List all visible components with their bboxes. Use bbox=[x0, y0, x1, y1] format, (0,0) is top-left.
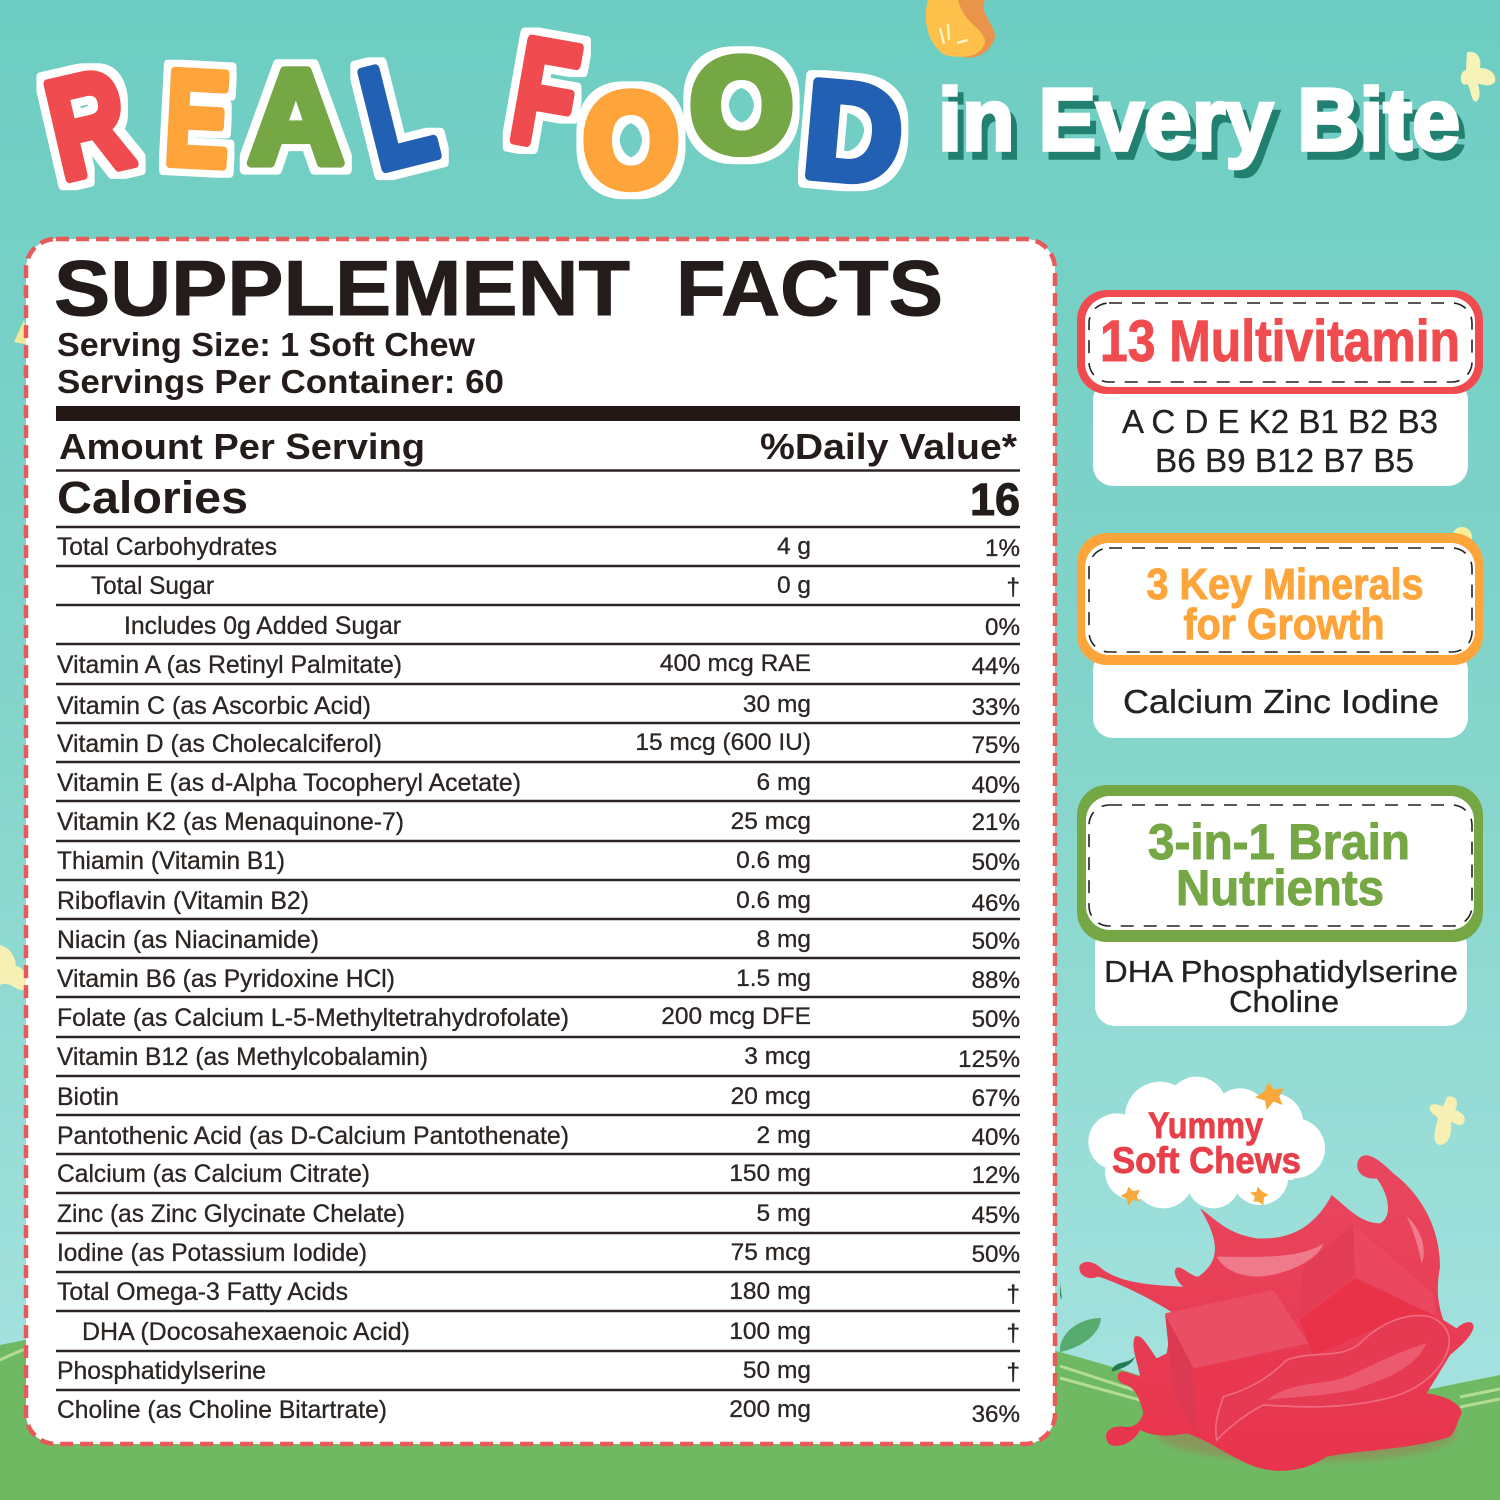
letter E: E bbox=[161, 41, 233, 195]
icon: pale shape left edge bbox=[0, 945, 27, 990]
title: REAL FOOD bbox=[34, 9, 908, 213]
nutrient rows: Niacin (as Niacinamide) bbox=[57, 926, 319, 954]
nutrient rows: Calcium (as Calcium Citrate) bbox=[57, 1160, 370, 1188]
nutrient rows: 6 mg bbox=[757, 769, 811, 796]
heading: yummy soft chews: Yummy bbox=[1148, 1105, 1263, 1146]
heading: 3 key minerals: 3 Key Minerals bbox=[1146, 560, 1424, 609]
nutrient rows: Zinc (as Zinc Glycinate Chelate) bbox=[57, 1200, 405, 1228]
nutrient rows: 75% bbox=[972, 732, 1020, 759]
nutrient rows: 4 g bbox=[777, 533, 811, 560]
heading: 3-in-1 brain nutrients: 3-in-1 Brain bbox=[1148, 814, 1410, 870]
nutrient rows: 3 mcg bbox=[744, 1043, 811, 1070]
nutrient rows: 50% bbox=[972, 928, 1020, 955]
nutrient rows: 1.5 mg bbox=[736, 965, 811, 992]
nutrient rows: Pantothenic Acid (as D-Calcium Pantothenate) bbox=[57, 1122, 569, 1150]
icon: pale shape behind panel bbox=[14, 320, 30, 345]
nutrient rows: 0% bbox=[985, 614, 1020, 641]
panel: 13 multivitamin: B6 B9 B12 B7 B5 bbox=[1155, 442, 1414, 479]
letter O orange: O bbox=[584, 67, 678, 213]
left cube bbox=[1165, 1290, 1312, 1435]
panel: 3-in-1 brain nutrients: Nutrients bbox=[1176, 860, 1384, 916]
heading: yummy soft chews: Soft Chews bbox=[1112, 1140, 1301, 1181]
serving size: Serving Size: 1 Soft Chew bbox=[57, 326, 475, 363]
star right bbox=[1250, 1187, 1268, 1205]
nutrient rows: 88% bbox=[972, 967, 1020, 994]
nutrient rows: † bbox=[1006, 574, 1020, 601]
nutrient rows: 67% bbox=[972, 1085, 1020, 1112]
nutrient rows: 50% bbox=[972, 1006, 1020, 1033]
nutrient rows: 125% bbox=[958, 1046, 1020, 1073]
nutrient rows: Total Omega-3 Fatty Acids bbox=[57, 1278, 348, 1306]
nutrient rows: 50% bbox=[972, 1241, 1020, 1268]
nutrient rows: Vitamin C (as Ascorbic Acid) bbox=[57, 692, 371, 720]
icon: pale cross lower right bbox=[1430, 1096, 1465, 1145]
nutrient rows: 200 mg bbox=[729, 1396, 811, 1423]
nutrient rows: 400 mcg RAE bbox=[660, 650, 811, 677]
nutrient rows: 40% bbox=[972, 1124, 1020, 1151]
amount per serving: Amount Per Serving bbox=[59, 426, 425, 467]
brain nutrients list: DHA Phosphatidylserine bbox=[1104, 954, 1458, 989]
letter O green: O bbox=[691, 32, 792, 178]
nutrient rows: 1% bbox=[985, 535, 1020, 562]
nutrient rows: Total Sugar bbox=[91, 572, 214, 600]
calories value: 16 bbox=[970, 474, 1020, 525]
cloud bbox=[1088, 1077, 1325, 1208]
star left bbox=[1121, 1187, 1140, 1206]
nutrient rows bbox=[57, 533, 1020, 1428]
panel: 3 key minerals: for Growth bbox=[1184, 600, 1384, 649]
nutrient rows: Riboflavin (Vitamin B2) bbox=[57, 887, 309, 915]
nutrient rows: 8 mg bbox=[757, 926, 811, 953]
icon: butterfly bbox=[926, 0, 995, 58]
nutrient rows: 50% bbox=[972, 849, 1020, 876]
illustration: red splash with soft chews bbox=[1079, 1077, 1474, 1471]
nutrient rows: 21% bbox=[972, 809, 1020, 836]
nutrient rows: † bbox=[1006, 1281, 1020, 1308]
nutrient rows: 180 mg bbox=[729, 1278, 811, 1305]
heading: supplement facts bbox=[54, 244, 943, 332]
nutrient rows: 40% bbox=[972, 772, 1020, 799]
icon: pale cross top right bbox=[1461, 52, 1495, 102]
calories label: Calories bbox=[57, 472, 248, 523]
nutrient rows: 2 mg bbox=[757, 1122, 811, 1149]
subtitle: in Every Bite: in Every Bite bbox=[938, 70, 1460, 169]
nutrient rows: 0 g bbox=[777, 572, 811, 599]
nutrient rows: 30 mg bbox=[743, 691, 811, 718]
vitamin list: A C D E K2 B1 B2 B3 bbox=[1122, 403, 1438, 440]
nutrient rows: 36% bbox=[972, 1401, 1020, 1428]
letter L: L bbox=[347, 29, 449, 200]
heading: supplement facts: SUPPLEMENT bbox=[54, 244, 630, 332]
nutrient rows: 25 mcg bbox=[731, 808, 811, 835]
nutrient rows: Vitamin E (as d-Alpha Tocopheryl Acetate) bbox=[57, 769, 521, 797]
row rules bbox=[56, 470, 1020, 1390]
panel: supplement facts bbox=[26, 239, 1055, 1444]
thick rule bbox=[56, 406, 1020, 421]
heading: supplement facts: FACTS bbox=[676, 244, 943, 332]
panel: 13 multivitamin bbox=[1077, 290, 1483, 486]
splash glow bbox=[1157, 1405, 1457, 1462]
nutrient rows: Vitamin B6 (as Pyridoxine HCl) bbox=[57, 965, 395, 993]
nutrient rows: 200 mcg DFE bbox=[661, 1003, 811, 1030]
nutrient rows: 12% bbox=[972, 1162, 1020, 1189]
nutrient rows: 33% bbox=[972, 694, 1020, 721]
nutrient rows: Vitamin K2 (as Menaquinone-7) bbox=[57, 808, 404, 836]
letter R: R bbox=[34, 40, 144, 210]
letter F: F bbox=[501, 9, 589, 180]
daily value: %Daily Value* bbox=[760, 426, 1017, 467]
splash body bbox=[1079, 1155, 1474, 1471]
nutrient rows: 46% bbox=[972, 890, 1020, 917]
nutrient rows: Vitamin A (as Retinyl Palmitate) bbox=[57, 651, 402, 679]
nutrient rows: 150 mg bbox=[729, 1160, 811, 1187]
nutrient rows: Folate (as Calcium L-5-Methyltetrahydrofolate) bbox=[57, 1004, 569, 1032]
nutrient rows: 5 mg bbox=[757, 1200, 811, 1227]
nutrient rows: Biotin bbox=[57, 1083, 119, 1111]
green hills bbox=[0, 1294, 1500, 1500]
nutrient rows: 20 mcg bbox=[731, 1083, 811, 1110]
star large bbox=[1255, 1083, 1283, 1110]
nutrient rows: Includes 0g Added Sugar bbox=[124, 612, 401, 640]
heading: yummy soft chews bbox=[1112, 1105, 1301, 1181]
nutrient rows: Vitamin B12 (as Methylcobalamin) bbox=[57, 1043, 428, 1071]
nutrient rows: DHA (Docosahexaenoic Acid) bbox=[82, 1318, 410, 1346]
nutrient rows: 44% bbox=[972, 653, 1020, 680]
nutrient rows: † bbox=[1006, 1359, 1020, 1386]
nutrient rows: 75 mcg bbox=[731, 1239, 811, 1266]
nutrient rows: Vitamin D (as Cholecalciferol) bbox=[57, 730, 382, 758]
panel: 3 key minerals bbox=[1077, 533, 1483, 738]
wave highlight bbox=[1267, 1343, 1427, 1400]
letter A: A bbox=[248, 42, 344, 192]
servings per container: Servings Per Container: 60 bbox=[57, 363, 504, 400]
panel: 3-in-1 brain nutrients: Choline bbox=[1229, 984, 1339, 1019]
nutrient rows: 15 mcg (600 IU) bbox=[635, 729, 811, 756]
front wave bbox=[1216, 1316, 1449, 1440]
nutrient rows: 0.6 mg bbox=[736, 847, 811, 874]
nutrient rows: 45% bbox=[972, 1202, 1020, 1229]
icon: pale shape behind minerals box bbox=[1452, 527, 1472, 547]
nutrient rows: Choline (as Choline Bitartrate) bbox=[57, 1396, 387, 1424]
icon: leaf bbox=[1060, 1283, 1101, 1352]
nutrient rows: 50 mg bbox=[743, 1357, 811, 1384]
nutrient rows: Phosphatidylserine bbox=[57, 1357, 266, 1385]
nutrient rows: Thiamin (Vitamin B1) bbox=[57, 847, 285, 875]
nutrient rows: Iodine (as Potassium Iodide) bbox=[57, 1239, 367, 1267]
vine bbox=[1112, 1357, 1135, 1372]
nutrient rows: † bbox=[1006, 1320, 1020, 1347]
minerals list: Calcium Zinc Iodine bbox=[1123, 683, 1439, 720]
letter D: D bbox=[798, 51, 908, 213]
nutrient rows: 0.6 mg bbox=[736, 887, 811, 914]
nutrient rows: 100 mg bbox=[729, 1318, 811, 1345]
panel: 3-in-1 brain nutrients bbox=[1077, 785, 1483, 1026]
nutrient rows: Total Carbohydrates bbox=[57, 533, 277, 561]
right cube bbox=[1300, 1225, 1437, 1355]
splash highlight bbox=[1217, 1217, 1424, 1277]
